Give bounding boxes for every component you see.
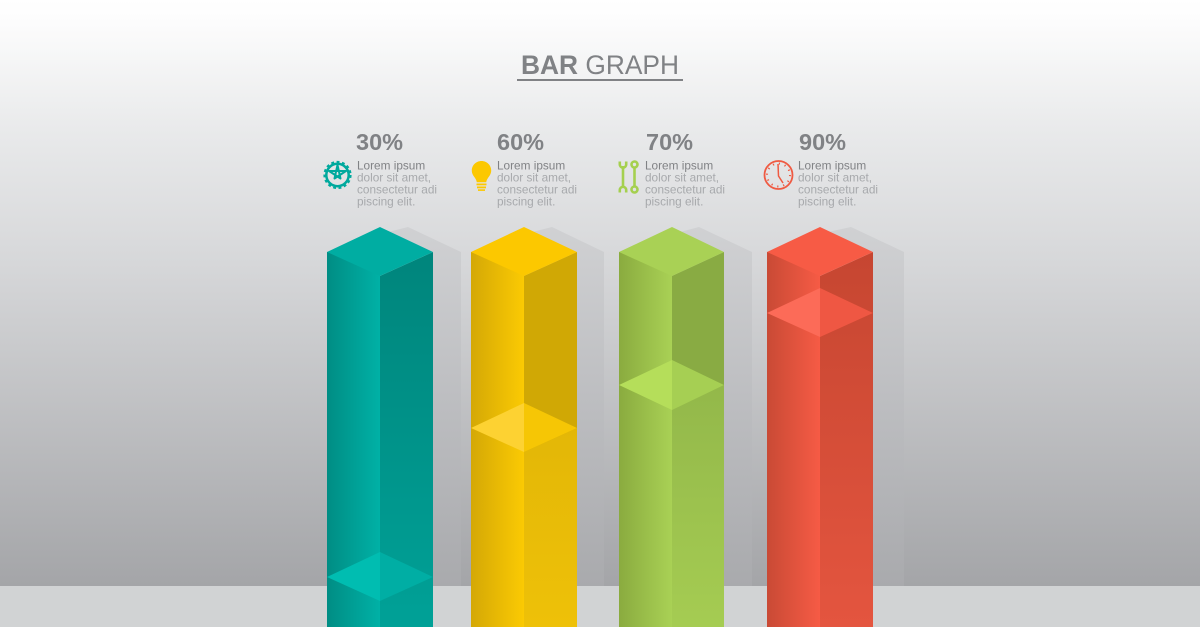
bar top: [619, 227, 724, 276]
description text: dolor sit amet,: [645, 170, 719, 184]
bar column: green 70%: [619, 129, 752, 627]
percent label: 70%: [646, 129, 693, 155]
description text: consectetur adi: [497, 182, 577, 196]
bar right face: [820, 252, 873, 627]
description text: consectetur adi: [357, 182, 437, 196]
bar column: red 90%: [764, 129, 904, 627]
description text: Lorem ipsum: [357, 158, 425, 172]
bar shadow: teal: [388, 227, 461, 586]
title: BAR GRAPH: [521, 50, 679, 80]
bar top: [471, 227, 577, 276]
description text: consectetur adi: [645, 182, 725, 196]
bar top: [327, 227, 433, 276]
description text: dolor sit amet,: [357, 170, 431, 184]
description text: piscing elit.: [645, 194, 703, 208]
bar left face: [767, 252, 820, 627]
description text: Lorem ipsum: [497, 158, 565, 172]
bar shadow: red: [828, 227, 904, 586]
bar right face: [524, 252, 577, 627]
bar top: [767, 227, 873, 276]
description text: piscing elit.: [357, 194, 415, 208]
percent label: 30%: [356, 129, 403, 155]
bar left face: [471, 252, 524, 627]
bar column: yellow 60%: [471, 129, 604, 627]
icon: clock: [764, 161, 792, 189]
icon: light bulb: [472, 161, 491, 191]
description text: piscing elit.: [798, 194, 856, 208]
percent label: 60%: [497, 129, 544, 155]
level marker 60%: [471, 403, 577, 452]
description text: consectetur adi: [798, 182, 878, 196]
level marker 30%: [327, 552, 433, 601]
level marker 90%: [767, 288, 873, 337]
icon: gear: [324, 162, 350, 188]
icon: wrenches: [620, 162, 638, 192]
description text: piscing elit.: [497, 194, 555, 208]
bar shadow: yellow: [532, 227, 604, 586]
description text: Lorem ipsum: [645, 158, 713, 172]
description text: Lorem ipsum: [798, 158, 866, 172]
bar shadow: green: [680, 227, 752, 586]
bar column: teal 30%: [324, 129, 461, 627]
description text: dolor sit amet,: [798, 170, 872, 184]
bar right face: [380, 252, 433, 627]
description text: dolor sit amet,: [497, 170, 571, 184]
level marker 70%: [619, 360, 724, 410]
floor: [0, 586, 1200, 627]
bar left face: [619, 252, 672, 627]
bar right face: [672, 252, 724, 627]
percent label: 90%: [799, 129, 846, 155]
bar left face: [327, 252, 380, 627]
